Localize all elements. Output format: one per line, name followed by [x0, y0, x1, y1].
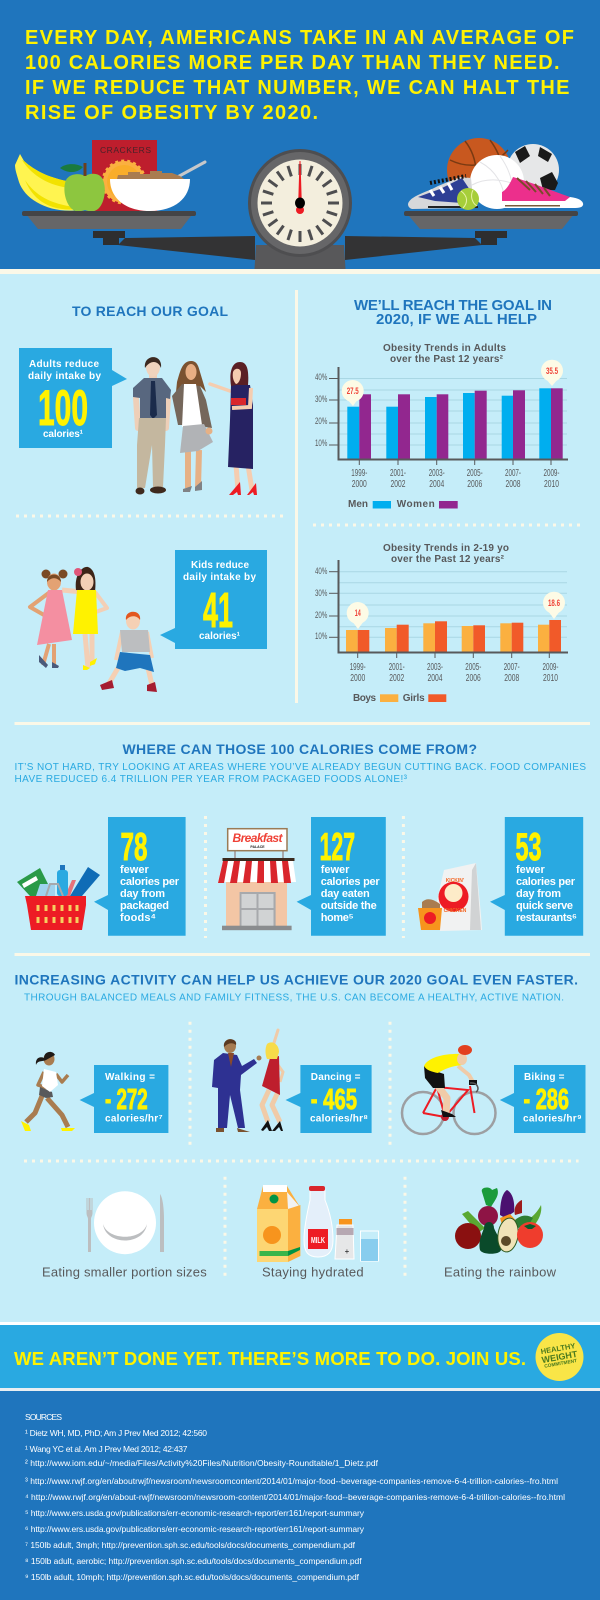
bar chart: obesity trends in adults: 2005-: [467, 468, 483, 479]
callout: kids: Kids reduce: [191, 560, 249, 571]
bar chart: obesity trends in kids: 2009-: [542, 662, 558, 673]
callout: biking: - 286: [524, 1084, 569, 1116]
bar chart: obesity trends in adults: 2004: [429, 479, 444, 490]
callout: 127 calories: day eaten: [321, 888, 370, 900]
heading: to reach our goal: TO REACH OUR GOAL: [72, 303, 228, 319]
icon: fast food bag: CHICKEN: [444, 908, 467, 914]
callout: adults: calories¹: [43, 429, 84, 440]
icon: food on left pan: [15, 140, 205, 211]
heading: we'll reach the goal: WE’LL REACH THE GOAL IN: [354, 297, 552, 314]
bar chart: obesity trends in adults: 2008: [506, 479, 521, 490]
icon: healthy weight commitment logo: [536, 1333, 584, 1381]
callout: 127 calories: calories per: [321, 876, 380, 888]
bar chart: obesity trends in kids: 2001-: [389, 662, 405, 673]
bar chart: obesity trends in adults: 2007-: [505, 468, 521, 479]
title: [25, 27, 574, 124]
callout: walking: Walking =: [105, 1072, 155, 1083]
text block: source list: ⁶ http://www.ers.usda.gov/publications/err-economic-research-report/err161/report-summary: [25, 1524, 365, 1534]
dotted vertical divider: [402, 816, 405, 938]
bar chart: obesity trends in adults: 10%: [315, 438, 328, 449]
bar chart: obesity trends in kids: 2005-: [465, 662, 481, 673]
callout: 78 calories: packaged: [120, 900, 169, 912]
bar chart: obesity trends in adults: 20%: [315, 416, 328, 427]
dotted vertical divider: [224, 1177, 226, 1276]
icon: kids group: [30, 567, 157, 692]
callout: 127 calories: home⁵: [321, 912, 354, 924]
text block: intro: HAVE REDUCED 6.4 TRILLION PER YEAR FROM PACKAGED FOODS ALONE!³: [14, 774, 408, 785]
icon: food on left pan: CRACKERS: [100, 145, 151, 155]
callout: biking: [500, 1065, 586, 1133]
bar chart: obesity trends in kids: 2008: [504, 673, 519, 684]
callout: 78 calories: [94, 817, 186, 936]
text block: source list: ³ http://www.rwjf.org/en/aboutrwjf/newsroom/newsroomcontent/2014/01/major-food--beverage-companies-remove-6-4-trillion-calories--fro.html: [25, 1476, 558, 1486]
callout: kids: [160, 550, 267, 649]
dotted vertical divider: [204, 816, 207, 938]
callout: dancing: [286, 1065, 372, 1133]
icon: healthy weight commitment logo: WEIGHT: [541, 1349, 579, 1365]
call to action band: [0, 1322, 600, 1388]
vertical divider: [295, 290, 298, 703]
callout: dancing: Dancing =: [311, 1072, 361, 1083]
callout: 78 calories: fewer: [120, 864, 149, 876]
bar chart: obesity trends in adults: Men: [348, 499, 368, 510]
callout: 127 calories: fewer: [321, 864, 350, 876]
callout: dancing: calories/hr⁸: [310, 1114, 368, 1125]
callout: kids: daily intake by: [183, 572, 256, 583]
bar chart: obesity trends in adults: 40%: [315, 372, 328, 383]
callout: kids: calories¹: [199, 631, 241, 642]
callout: walking: calories/hr⁷: [105, 1114, 163, 1125]
bar chart: obesity trends in kids: 2004: [428, 673, 443, 684]
dotted vertical divider: [404, 1177, 406, 1276]
bar chart: obesity trends in kids: 1999-: [350, 662, 366, 673]
dotted divider right: [313, 524, 580, 526]
panel: kids: [30, 550, 267, 692]
callout: dancing: - 465: [311, 1084, 357, 1116]
text: staying hydrated: Staying hydrated: [262, 1265, 364, 1280]
bar chart: obesity trends in adults: over the Past 12 years²: [390, 354, 504, 365]
callout: walking: [80, 1065, 168, 1133]
text: join us: WE AREN’T DONE YET. THERE’S MORE TO DO. JOIN US.: [14, 1348, 526, 1369]
dotted divider: [24, 1160, 579, 1162]
text block: source list: ⁴ http://www.rwjf.org/en/about-rwjf/newsroom/newsroom-content/2014/01/major-food--beverage-companies-remove-6-4-trillion-calories--fro.html: [25, 1492, 565, 1502]
dotted vertical divider: [188, 1022, 192, 1145]
icon: balance scale: [22, 149, 578, 269]
heading: where can those 100 calories come from: WHERE CAN THOSE 100 CALORIES COME FROM?: [122, 741, 477, 757]
icon: drinks: [257, 1185, 378, 1262]
title: EVERY DAY, AMERICANS TAKE IN AN AVERAGE OF: [25, 27, 574, 49]
bar chart: obesity trends in kids: Boys: [353, 693, 376, 704]
bar chart: obesity trends in kids: 10%: [315, 631, 328, 642]
callout: adults: daily intake by: [28, 371, 101, 382]
callout: 53 calories: fewer: [516, 864, 545, 876]
callout: 127 calories: [297, 817, 386, 936]
callout: walking: - 272: [105, 1084, 148, 1116]
callout: 78 calories: calories per: [120, 876, 180, 888]
icon: plate and cutlery: [86, 1191, 164, 1254]
heading: sources: SOURCES: [25, 1412, 62, 1422]
text: eating smaller portion sizes: Eating smaller portion sizes: [42, 1265, 207, 1280]
bar chart: obesity trends in kids: 2000: [350, 673, 365, 684]
horizontal divider: [14, 722, 590, 725]
bar chart: obesity trends in kids: 18.6: [548, 598, 560, 608]
panel: healthy habits: [42, 1177, 557, 1280]
bar chart: obesity trends in kids: Girls: [403, 693, 425, 704]
title: 100 CALORIES MORE PER DAY THAN THEY NEED.: [25, 52, 560, 74]
text block: activity subtitle: THROUGH BALANCED MEALS AND FAMILY FITNESS, THE U.S. CAN BECOME A HEALTHY, ACTIVE NATION.: [24, 993, 564, 1004]
callout: biking: Biking =: [524, 1072, 565, 1083]
bar chart: obesity trends in adults: 2001-: [390, 468, 406, 479]
header panel: [0, 0, 600, 274]
title: RISE OF OBESITY BY 2020.: [25, 102, 318, 124]
bar chart: obesity trends in kids: 2010: [543, 673, 558, 684]
bar chart: obesity trends in kids: [315, 543, 568, 704]
callout: 53 calories: 53: [516, 826, 542, 869]
bar chart: obesity trends in adults: 27.5: [347, 386, 359, 396]
bar chart: obesity trends in kids: 2007-: [504, 662, 520, 673]
bar chart: obesity trends in adults: Obesity Trends in Adults: [383, 343, 506, 354]
heading: we'll reach the goal: [354, 297, 552, 328]
horizontal divider: [14, 953, 590, 956]
icon: restaurant: Breakfast: [232, 831, 284, 845]
panel: we'll reach the goal: [313, 297, 580, 704]
text block: source list: ² http://www.iom.edu/~/media/Files/Activity%20Files/Nutrition/Obesity-Roundtable/1_Dietz.pdf: [25, 1458, 379, 1468]
icon: drinks: +: [345, 1247, 350, 1256]
bar chart: obesity trends in adults: 2000: [352, 479, 367, 490]
bar chart: obesity trends in kids: 20%: [315, 610, 328, 621]
dotted divider left: [16, 514, 283, 518]
icon: fast food bag: [418, 863, 482, 931]
dotted vertical divider: [388, 1022, 392, 1145]
icon: fast food bag: KICKIN’: [446, 878, 465, 884]
bar chart: obesity trends in kids: 2006: [466, 673, 481, 684]
callout: 78 calories: foods⁴: [120, 912, 156, 924]
bar chart: obesity trends in kids: 40%: [315, 566, 328, 577]
icon: restaurant: PALACE: [250, 845, 265, 849]
text block: source list: ⁷ 150lb adult, 3mph; http://prevention.sph.sc.edu/tools/docs/documents_compendium.pdf: [25, 1540, 356, 1550]
bar chart: obesity trends in adults: Women: [397, 499, 435, 510]
bar chart: obesity trends in adults: 2003-: [429, 468, 445, 479]
callout: 127 calories: 127: [320, 826, 355, 869]
bar chart: obesity trends in adults: 2002: [390, 479, 406, 490]
callout: adults: 100: [38, 380, 88, 436]
callout: 53 calories: calories per: [516, 876, 576, 888]
bar chart: obesity trends in adults: 2009-: [544, 468, 560, 479]
sources panel: [0, 1388, 600, 1600]
bar chart: obesity trends in adults: 1999-: [351, 468, 367, 479]
callout: adults: Adults reduce: [29, 359, 99, 370]
text block: source list: ¹ Dietz WH, MD, PhD; Am J Prev Med 2012; 42:560: [25, 1428, 207, 1438]
callout: kids: 41: [203, 584, 233, 638]
bar chart: obesity trends in adults: 2010: [544, 479, 559, 490]
bar chart: obesity trends in adults: [315, 343, 568, 510]
icon: adults group: [133, 357, 257, 495]
text block: source list: ⁵ http://www.ers.usda.gov/publications/err-economic-research-report/err161/report-summary: [25, 1508, 365, 1518]
icon: grocery basket: [17, 865, 100, 930]
panel: where can those calories come from: [14, 741, 586, 938]
callout: biking: calories/hr⁹: [523, 1114, 582, 1125]
icon: drinks: MILK: [311, 1236, 325, 1245]
bar chart: obesity trends in adults: 35.5: [546, 366, 558, 376]
text block: source list: ¹ Wang YC et al. Am J Prev Med 2012; 42:437: [25, 1444, 188, 1454]
panel: to reach our goal: [19, 303, 257, 495]
bar chart: obesity trends in adults: 30%: [315, 394, 328, 405]
heading: we'll reach the goal: 2020, IF WE ALL HELP: [376, 311, 537, 328]
icon: healthy weight commitment logo: HEALTHY: [540, 1341, 576, 1356]
icon: healthy weight commitment logo: COMMITMENT: [544, 1358, 578, 1370]
icon: cyclist: [402, 1045, 496, 1134]
callout: 78 calories: 78: [120, 826, 148, 869]
icon: dancers: [212, 1030, 283, 1132]
icon: restaurant: [218, 829, 296, 930]
bar chart: obesity trends in kids: 2002: [389, 673, 404, 684]
text block: source list: [25, 1428, 565, 1582]
bar chart: obesity trends in kids: 30%: [315, 588, 328, 599]
text block: source list: ⁸ 150lb adult, aerobic; http://prevention.sph.sc.edu/tools/docs/documents_compendium.pdf: [25, 1556, 362, 1566]
callout: 53 calories: quick serve: [516, 900, 573, 912]
callout: 53 calories: day from: [516, 888, 561, 900]
bar chart: obesity trends in kids: over the Past 12 years²: [391, 554, 505, 565]
bar chart: obesity trends in adults: 2006: [467, 479, 482, 490]
icon: sports equipment on right pan: [408, 138, 583, 210]
bar chart: obesity trends in kids: 14: [355, 608, 361, 618]
bar chart: obesity trends in kids: Obesity Trends in 2-19 yo: [383, 543, 509, 554]
bar chart: obesity trends in kids: 2003-: [427, 662, 443, 673]
panel: increasing activity: [14, 972, 586, 1145]
text: eating the rainbow: Eating the rainbow: [444, 1265, 557, 1280]
title: IF WE REDUCE THAT NUMBER, WE CAN HALT THE: [25, 77, 570, 99]
text block: intro: [14, 762, 586, 785]
icon: vegetables: [455, 1188, 543, 1254]
callout: 78 calories: day from: [120, 888, 165, 900]
icon: runner: [21, 1052, 75, 1131]
text block: intro: IT’S NOT HARD, TRY LOOKING AT AREAS WHERE YOU’VE ALREADY BEGUN CUTTING BACK. FOOD COMPANIES: [14, 762, 586, 773]
callout: 53 calories: restaurants⁶: [516, 912, 577, 924]
heading: increasing activity: INCREASING ACTIVITY CAN HELP US ACHIEVE OUR 2020 GOAL EVEN FASTER.: [14, 972, 578, 988]
callout: adults: [19, 348, 127, 448]
callout: 127 calories: outside the: [321, 900, 377, 912]
callout: 53 calories: [490, 817, 583, 936]
text block: source list: ⁹ 150lb adult, 10mph; http://prevention.sph.sc.edu/tools/docs/documents_compendium.pdf: [25, 1572, 360, 1582]
